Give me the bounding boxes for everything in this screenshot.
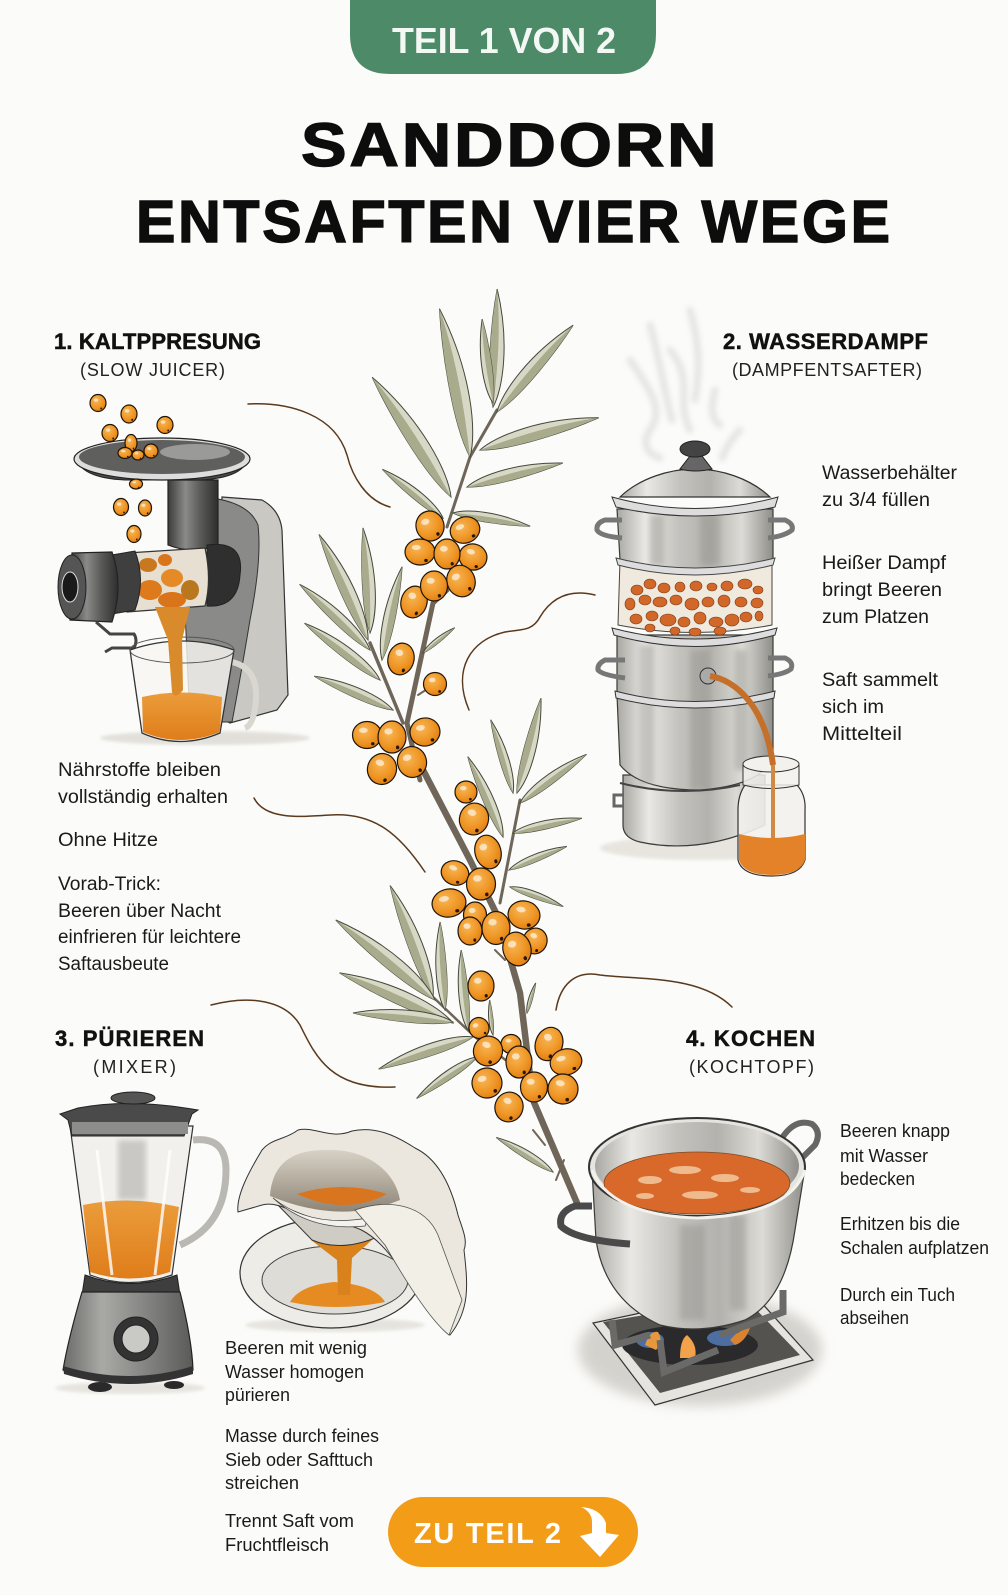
notes: Ohne Hitze bbox=[58, 830, 158, 851]
notes: Saftausbeute bbox=[58, 954, 169, 975]
subheading: (DAMPFENTSAFTER) bbox=[732, 360, 922, 380]
handles bbox=[597, 520, 622, 538]
notes: Schalen aufplatzen bbox=[840, 1238, 989, 1258]
notes: zu 3/4 füllen bbox=[822, 490, 930, 511]
notes: bedecken bbox=[840, 1169, 915, 1189]
title bbox=[136, 110, 890, 255]
notes: Beeren mit wenig bbox=[225, 1338, 367, 1358]
illustration: pot on gas burner bbox=[561, 1118, 822, 1406]
notes bbox=[58, 760, 241, 975]
notes: Erhitzen bis die bbox=[840, 1214, 960, 1234]
notes: Wasserbehälter bbox=[822, 463, 958, 484]
notes: vollständig erhalten bbox=[58, 787, 228, 808]
measuring jug bbox=[232, 662, 256, 728]
notes: streichen bbox=[225, 1473, 299, 1493]
right handle bbox=[782, 1123, 818, 1158]
notes bbox=[225, 1338, 379, 1555]
illustration: steam juicer bbox=[597, 310, 805, 876]
pot body bbox=[592, 1168, 805, 1329]
illustration: cloth strainer and bowl bbox=[238, 1129, 467, 1335]
cloth bbox=[238, 1129, 467, 1335]
notes: Mittelteil bbox=[822, 724, 902, 745]
leaves bbox=[297, 289, 600, 1174]
lower pot bbox=[623, 775, 765, 846]
puree stream bbox=[311, 1240, 372, 1295]
notes: Wasser homogen bbox=[225, 1362, 364, 1382]
heading: 1. KALTPPRESUNG bbox=[54, 329, 261, 354]
falling berries bbox=[90, 394, 173, 542]
heading: 2. WASSERDAMPF bbox=[723, 329, 928, 354]
notes: mit Wasser bbox=[840, 1146, 928, 1166]
notes: Nährstoffe bleiben bbox=[58, 760, 221, 781]
panel: method 4 boiling bbox=[561, 1026, 989, 1406]
berries in the glass tube bbox=[138, 554, 199, 608]
notes: Beeren knapp bbox=[840, 1121, 950, 1141]
upper section bbox=[617, 509, 773, 569]
panel: method 3 blending bbox=[55, 1026, 467, 1555]
steam bbox=[630, 310, 740, 458]
connector: branch to method 1 bbox=[248, 404, 390, 507]
notes: Beeren über Nacht bbox=[58, 901, 222, 922]
branch stems bbox=[370, 410, 577, 1203]
badge: part indicator bbox=[350, 0, 656, 74]
icon: curved down arrow bbox=[580, 1507, 619, 1557]
illustration: slow juicer bbox=[58, 394, 310, 745]
notes bbox=[840, 1121, 989, 1328]
notes: Vorab-Trick: bbox=[58, 874, 161, 895]
notes bbox=[822, 463, 958, 745]
badge: part indicator: TEIL 1 VON 2 bbox=[392, 20, 616, 61]
left handle bbox=[561, 1206, 630, 1244]
cloth drape bbox=[355, 1204, 462, 1335]
heading: 3. PÜRIEREN bbox=[55, 1026, 204, 1051]
illustration: sea buckthorn branch bbox=[297, 289, 600, 1203]
button: to part 2 bbox=[388, 1497, 638, 1567]
subheading: (SLOW JUICER) bbox=[80, 360, 225, 380]
bowl bbox=[240, 1218, 422, 1328]
notes: einfrieren für leichtere bbox=[58, 927, 241, 948]
notes: Saft sammelt bbox=[822, 670, 939, 691]
title: SANDDORN bbox=[301, 110, 717, 179]
panel: method 2 steam bbox=[597, 310, 958, 876]
connector: branch to method 1 notes bbox=[254, 798, 425, 872]
subheading: (MIXER) bbox=[93, 1057, 176, 1077]
notes: Masse durch feines bbox=[225, 1426, 379, 1446]
notes: Trennt Saft vom bbox=[225, 1511, 354, 1531]
notes: Fruchtfleisch bbox=[225, 1535, 329, 1555]
connector: branch to method 3 bbox=[211, 1000, 395, 1087]
lid bbox=[620, 469, 770, 497]
berries bbox=[352, 508, 585, 1126]
notes: sich im bbox=[822, 697, 884, 718]
connector: branch to method 4 bbox=[556, 974, 732, 1010]
cloth cavity bbox=[270, 1150, 400, 1212]
button: to part 2: ZU TEIL 2 bbox=[414, 1518, 561, 1550]
jar bbox=[738, 785, 805, 876]
connector: branch to method 2 bbox=[463, 593, 595, 710]
rings bbox=[616, 558, 775, 575]
notes: pürieren bbox=[225, 1385, 290, 1405]
subheading: (KOCHTOPF) bbox=[689, 1057, 814, 1077]
flames bbox=[636, 1328, 750, 1358]
strainer bbox=[273, 1200, 375, 1246]
panel: method 1 cold pressing bbox=[54, 329, 310, 975]
illustration: blender bbox=[55, 1092, 226, 1394]
berry chamber bbox=[618, 560, 772, 632]
notes: zum Platzen bbox=[822, 607, 929, 628]
spout and stream bbox=[700, 668, 716, 684]
notes: abseihen bbox=[840, 1308, 909, 1328]
notes: Sieb oder Safttuch bbox=[225, 1450, 373, 1470]
notes: Durch ein Tuch bbox=[840, 1285, 955, 1305]
soup bbox=[604, 1152, 790, 1214]
notes: bringt Beeren bbox=[822, 580, 942, 601]
title: ENTSAFTEN VIER WEGE bbox=[136, 189, 890, 255]
notes: Heißer Dampf bbox=[822, 553, 947, 574]
heading: 4. KOCHEN bbox=[686, 1026, 815, 1051]
